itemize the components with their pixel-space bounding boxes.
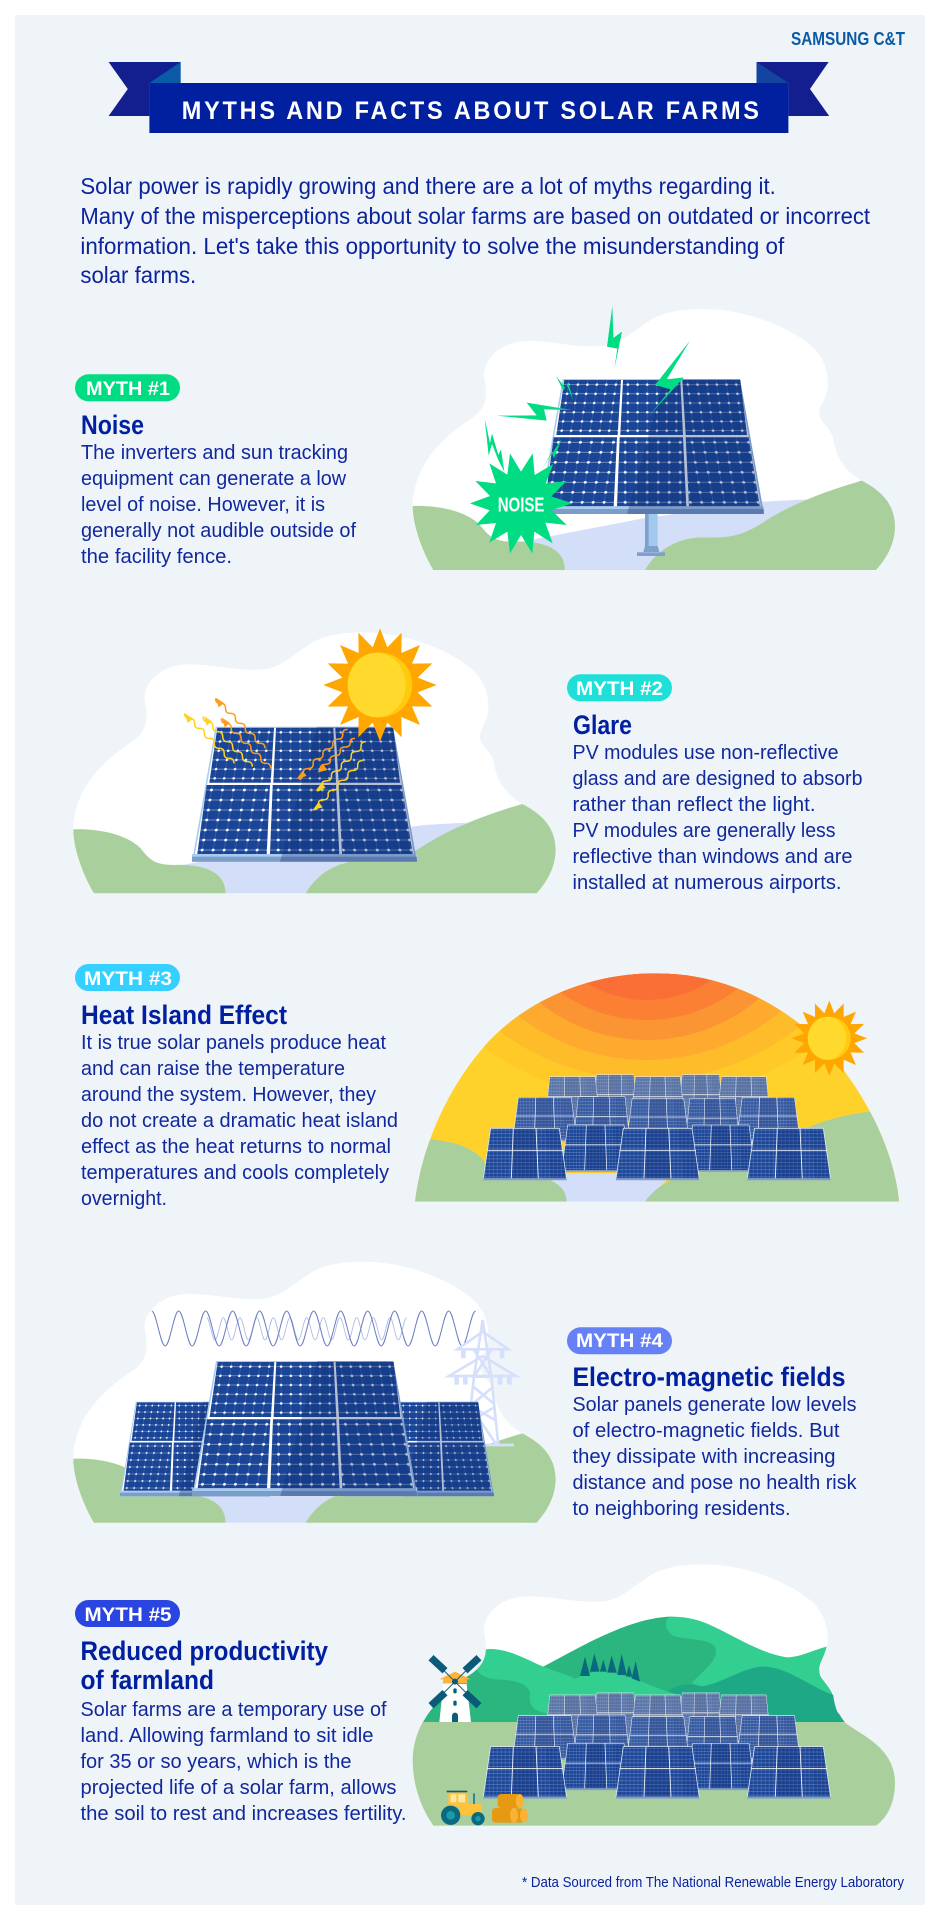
- intro text: [80, 173, 871, 288]
- myth 4 text block: [567, 1327, 857, 1520]
- badge: myth 4: MYTH #4: [576, 1330, 663, 1352]
- illustration: glare: [73, 628, 556, 893]
- sun: [792, 1001, 867, 1076]
- heading: heat island effect: Heat Island Effect: [81, 1000, 287, 1030]
- badge: myth 3: [75, 964, 180, 991]
- body: heat island effect: do not create a dramatic heat island: [81, 1110, 398, 1132]
- body: glare: reflective than windows and are: [572, 846, 852, 868]
- illustration: noise solar panel: [413, 306, 895, 570]
- body: reduced productivity: projected life of a solar farm, allows: [80, 1777, 396, 1799]
- myth 5 text block: [75, 1600, 406, 1825]
- rear right solar panel: [344, 1402, 494, 1496]
- body: electro-magnetic fields: [572, 1394, 857, 1520]
- tractor: [441, 1791, 485, 1825]
- body: reduced productivity: land. Allowing farmland to sit idle: [80, 1725, 374, 1747]
- body: electro-magnetic fields: they dissipate with increasing: [572, 1446, 836, 1468]
- intro text: solar farms.: [80, 262, 196, 288]
- solar panel pole: [637, 513, 665, 556]
- illustration: heat island: [415, 973, 899, 1202]
- body: reduced productivity: Solar farms are a temporary use of: [80, 1699, 387, 1721]
- illustration: farmland: [413, 1564, 895, 1826]
- body: electro-magnetic fields: Solar panels generate low levels: [572, 1394, 856, 1416]
- badge: myth 5: [75, 1600, 180, 1627]
- heading: reduced productivity of farmland: of farmland: [80, 1665, 214, 1695]
- body: heat island effect: [81, 1032, 398, 1210]
- body: electro-magnetic fields: to neighboring residents.: [572, 1498, 790, 1520]
- myth 1 text block: [75, 374, 356, 568]
- badge: myth 4: [567, 1327, 672, 1354]
- intro text: information. Let's take this opportunity to solve the misunderstanding of: [80, 233, 785, 259]
- intro text: Many of the misperceptions about solar farms are based on outdated or incorrect: [80, 203, 871, 229]
- heat dome with temperature bands: [415, 973, 899, 1202]
- body: reduced productivity: the soil to rest and increases fertility.: [80, 1803, 406, 1825]
- body: noise: equipment can generate a low: [81, 468, 347, 490]
- badge: myth 5: MYTH #5: [84, 1604, 172, 1626]
- body: heat island effect: overnight.: [81, 1188, 167, 1210]
- body: glare: PV modules use non-reflective: [572, 742, 838, 764]
- solar farm: [483, 1693, 831, 1799]
- sun: [323, 628, 437, 742]
- transmission tower: [449, 1320, 516, 1445]
- body: noise: level of noise. However, it is: [81, 494, 325, 516]
- heading: reduced productivity of farmland: Reduced productivity: [80, 1636, 328, 1666]
- noise starburst: [470, 453, 573, 553]
- trees: [580, 1653, 640, 1682]
- body: glare: glass and are designed to absorb: [572, 768, 862, 790]
- badge: myth 2: MYTH #2: [576, 678, 663, 700]
- heading: electro-magnetic fields: Electro-magnetic fields: [572, 1362, 846, 1392]
- heading: reduced productivity of farmland: [80, 1636, 328, 1695]
- body: heat island effect: effect as the heat returns to normal: [81, 1136, 391, 1158]
- logo: Samsung C&T: SAMSUNG C&T: [791, 29, 905, 49]
- body: heat island effect: and can raise the temperature: [81, 1058, 345, 1080]
- solar farm: [483, 1075, 831, 1180]
- title ribbon: [109, 62, 829, 133]
- badge: myth 3: MYTH #3: [84, 968, 172, 990]
- myth 2 text block: [567, 674, 862, 894]
- heading: noise: Noise: [81, 410, 144, 440]
- ground: [415, 1111, 907, 1202]
- body: reduced productivity: for 35 or so years, which is the: [80, 1751, 352, 1773]
- front solar panel: [192, 1361, 417, 1496]
- body: electro-magnetic fields: distance and pose no health risk: [572, 1472, 857, 1494]
- electromagnetic waves: [152, 1311, 476, 1346]
- body: noise: generally not audible outside of: [81, 520, 356, 542]
- heading: glare: Glare: [573, 710, 632, 740]
- title ribbon: MYTHS AND FACTS ABOUT SOLAR FARMS: [182, 97, 759, 125]
- body: heat island effect: around the system. However, they: [81, 1084, 376, 1106]
- hay bales: [492, 1794, 528, 1823]
- illustration: electro-magnetic fields: [73, 1262, 556, 1523]
- windmill: [431, 1658, 479, 1722]
- body: noise: the facility fence.: [81, 546, 232, 568]
- noise starburst: NOISE: [498, 495, 544, 517]
- body: heat island effect: temperatures and cools completely: [81, 1162, 389, 1184]
- white blob: [413, 1564, 862, 1825]
- reflected and incoming light arrows: [185, 698, 366, 810]
- rear left solar panel: [120, 1402, 270, 1496]
- body: glare: installed at numerous airports.: [572, 872, 842, 894]
- solar panel: [192, 727, 417, 862]
- ground: [413, 1722, 895, 1826]
- myth 3 text block: [75, 964, 398, 1210]
- body: glare: rather than reflect the light.: [572, 794, 816, 816]
- intro text: Solar power is rapidly growing and there are a lot of myths regarding it.: [80, 173, 776, 199]
- body: heat island effect: It is true solar panels produce heat: [81, 1032, 386, 1054]
- badge: myth 1: MYTH #1: [86, 378, 170, 400]
- badge: myth 1: [75, 374, 180, 401]
- body: noise: [81, 442, 356, 568]
- badge: myth 2: [567, 674, 672, 701]
- body: glare: [572, 742, 862, 894]
- green mountains: [423, 1617, 847, 1722]
- body: glare: PV modules are generally less: [572, 820, 836, 842]
- body: reduced productivity: [80, 1699, 406, 1825]
- lightning bolts: [485, 306, 690, 472]
- body: electro-magnetic fields: of electro-magnetic fields. But: [572, 1420, 840, 1442]
- body: noise: The inverters and sun tracking: [81, 442, 348, 464]
- solar panel: [539, 379, 764, 514]
